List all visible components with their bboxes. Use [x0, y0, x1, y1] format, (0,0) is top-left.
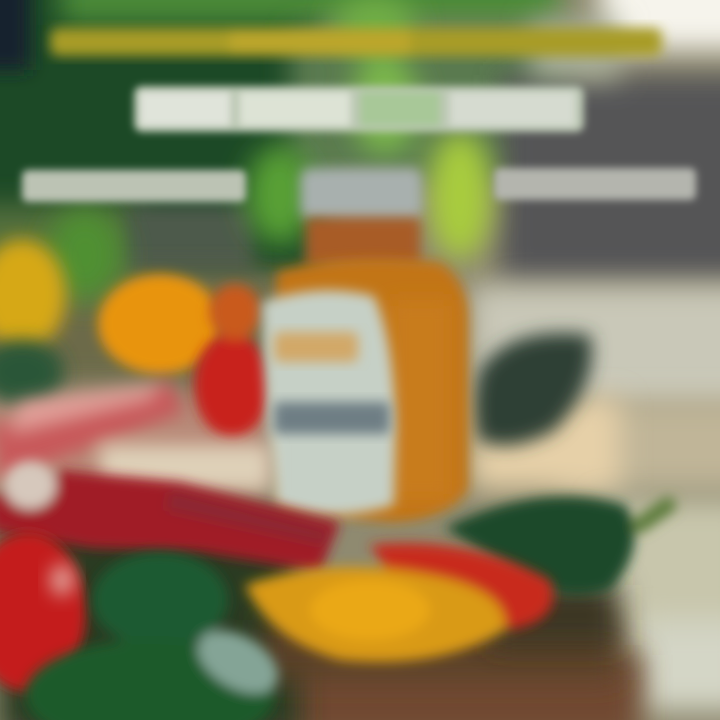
vegetable: orange tomato	[98, 274, 222, 374]
label dark text band	[274, 402, 390, 434]
vegetable: green pepper at left edge	[0, 340, 64, 404]
bottle cap	[300, 168, 422, 220]
leaves: bright green foliage	[47, 0, 492, 303]
vegetable: red and yellow peppers in foreground	[245, 543, 553, 662]
bottle neck	[306, 218, 420, 266]
heading: yellow title line	[50, 28, 662, 56]
vegetable: red pepper behind bottle	[194, 284, 270, 437]
food: red strips in centre	[0, 461, 340, 572]
bottle shaded edge	[390, 300, 452, 500]
vegetable: tomato highlight	[50, 564, 74, 596]
vegetable: green peppers at bottom	[25, 552, 289, 720]
vegetable: dark green pepper at right	[445, 496, 668, 595]
vegetable: yellow pepper at left edge	[0, 239, 66, 351]
text block: right subtitle	[494, 168, 696, 200]
label orange text band	[274, 332, 358, 362]
vegetable: red tomato at bottom left	[0, 532, 86, 692]
bottle: orange supplement bottle with white label	[262, 168, 468, 522]
bottle label	[262, 290, 396, 515]
text block: left subtitle	[22, 170, 246, 202]
food: bacon strips at left	[0, 380, 270, 490]
heading: white main title	[134, 86, 584, 132]
vegetable: avocado	[474, 333, 592, 446]
bottle body	[276, 259, 468, 522]
